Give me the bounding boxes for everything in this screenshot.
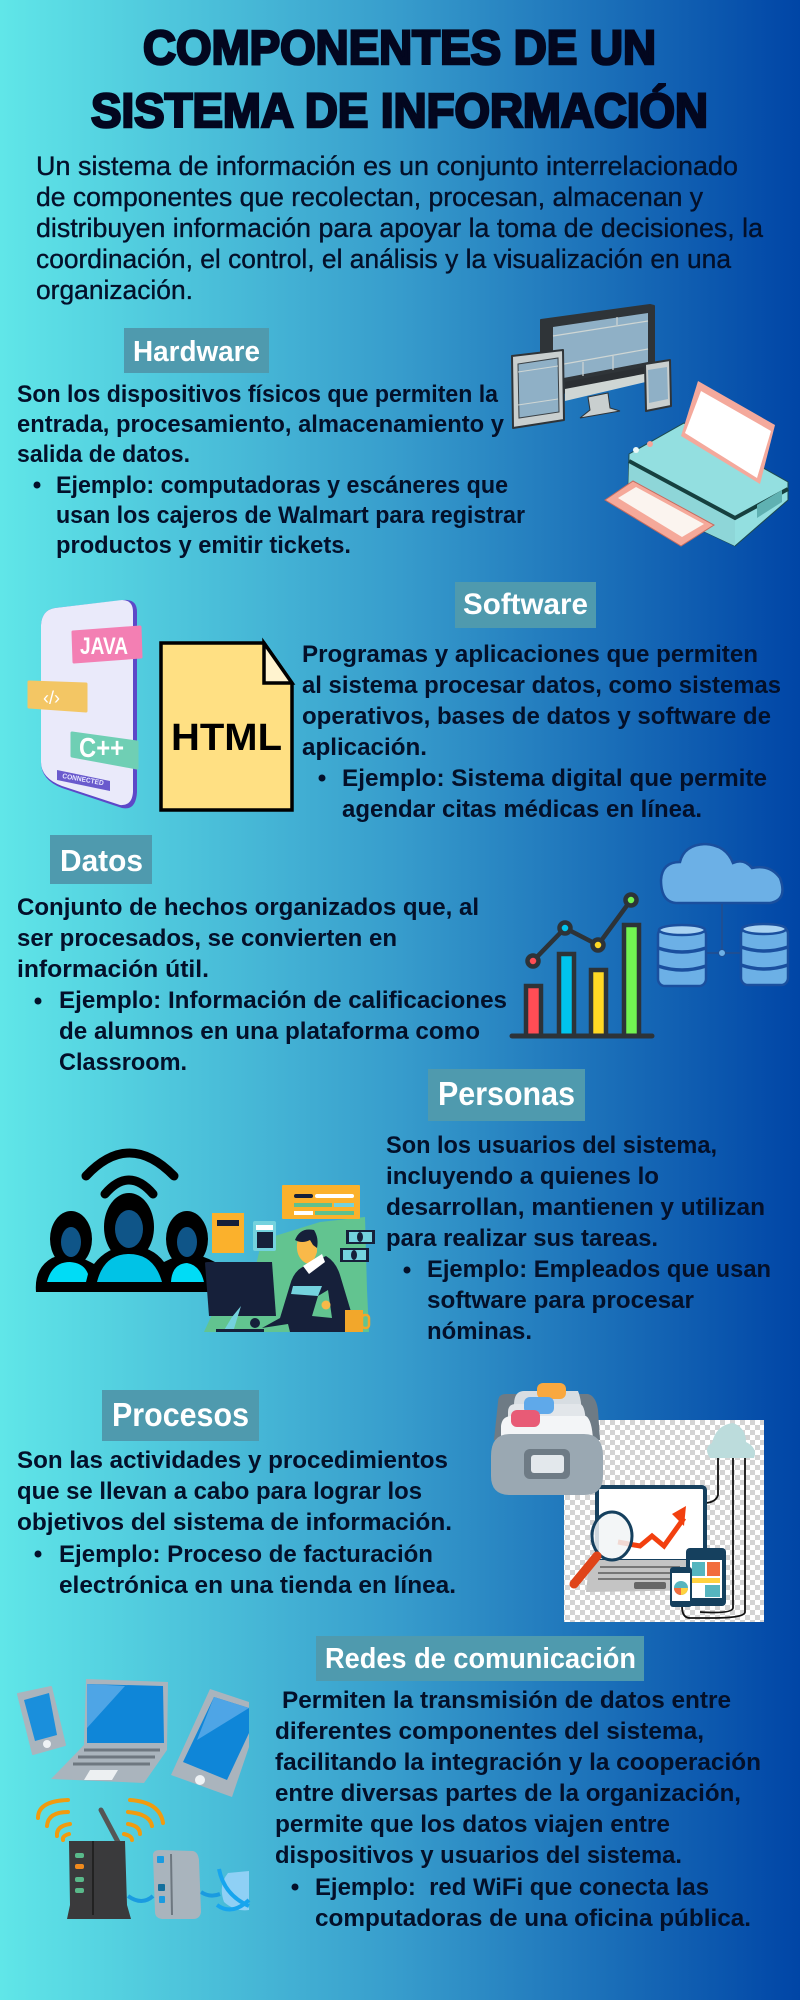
title: COMPONENTES DE UN	[143, 22, 656, 75]
intro text: organización.	[36, 275, 193, 305]
icon: connected people	[36, 1153, 215, 1292]
heading: personas: Personas	[438, 1075, 575, 1112]
icon: code phone: ‹/›	[43, 688, 60, 708]
procesos description: Ejemplo: Proceso de facturación	[59, 1541, 433, 1568]
icon: html file: HTML	[171, 717, 282, 759]
datos description: Classroom.	[59, 1049, 187, 1076]
panel: datos	[17, 835, 788, 1076]
datos description: Ejemplo: Información de calificaciones	[59, 987, 507, 1014]
personas description: Son los usuarios del sistema,	[386, 1132, 717, 1159]
software description: Programas y aplicaciones que permiten	[302, 641, 758, 668]
panel: procesos	[17, 1383, 764, 1622]
software description: aplicación.	[302, 734, 427, 761]
hardware description: usan los cajeros de Walmart para registrar	[56, 502, 525, 529]
intro text: distribuyen información para apoyar la toma de decisiones, la	[36, 213, 763, 243]
software description: Ejemplo: Sistema digital que permite	[342, 765, 767, 792]
redes description: facilitando la integración y la cooperación	[275, 1749, 761, 1776]
heading: redes de comunicación: Redes de comunicación	[325, 1643, 636, 1675]
procesos description: objetivos del sistema de información.	[17, 1509, 452, 1536]
personas description: software para procesar	[427, 1287, 694, 1314]
procesos description: electrónica en una tienda en línea.	[59, 1572, 456, 1599]
redes description: dispositivos y usuarios del sistema.	[275, 1842, 682, 1869]
icon: devices on checkered background	[564, 1420, 764, 1622]
redes description: permite que los datos viajen entre	[275, 1811, 670, 1838]
datos description: de alumnos en una plataforma como	[59, 1018, 480, 1045]
icon: code phone	[29, 600, 141, 808]
redes description: diferentes componentes del sistema,	[275, 1718, 704, 1745]
intro text: Un sistema de información es un conjunto interrelacionado	[36, 151, 738, 181]
panel: personas	[36, 1069, 771, 1345]
icon: code phone: JAVA	[80, 633, 128, 660]
intro text: de componentes que recolectan, procesan, almacenan y	[36, 182, 704, 212]
panel: software	[29, 582, 781, 823]
heading: hardware	[124, 328, 269, 373]
icon: printer	[605, 381, 788, 546]
hardware description	[17, 381, 525, 559]
panel: redes de comunicación	[18, 1636, 761, 1932]
personas description: desarrollan, mantienen y utilizan	[386, 1194, 765, 1221]
software description	[302, 641, 781, 823]
intro text	[36, 151, 763, 305]
personas description: Ejemplo: Empleados que usan	[427, 1256, 771, 1283]
heading: datos	[50, 835, 152, 884]
icon: code phone: C++	[79, 732, 124, 763]
icon: html file	[161, 643, 292, 810]
software description: operativos, bases de datos y software de	[302, 703, 771, 730]
heading: hardware: Hardware	[133, 336, 260, 368]
icon: code phone: CONNECTED	[62, 773, 104, 787]
icon: phone, laptop and tablet	[18, 1679, 249, 1797]
hardware description: salida de datos.	[17, 441, 190, 468]
redes description: entre diversas partes de la organización,	[275, 1780, 741, 1807]
heading: datos: Datos	[60, 843, 143, 878]
intro text: coordinación, el control, el análisis y la visualización en una	[36, 244, 731, 274]
icon: office worker	[204, 1185, 375, 1332]
redes description: computadoras de una oficina pública.	[315, 1905, 751, 1932]
personas description: para realizar sus tareas.	[386, 1225, 658, 1252]
title	[91, 22, 708, 138]
procesos description: Son las actividades y procedimientos	[17, 1447, 448, 1474]
title: SISTEMA DE INFORMACIÓN	[91, 83, 708, 138]
procesos description: que se llevan a cabo para lograr los	[17, 1478, 422, 1505]
heading: software	[455, 582, 596, 628]
personas description: incluyendo a quienes lo	[386, 1163, 659, 1190]
hardware description: Ejemplo: computadoras y escáneres que	[56, 472, 508, 499]
software description: agendar citas médicas en línea.	[342, 796, 702, 823]
hardware description: productos y emitir tickets.	[56, 532, 351, 559]
personas description: nóminas.	[427, 1318, 532, 1345]
datos description: ser procesados, se convierten en	[17, 925, 397, 952]
heading: software: Software	[463, 588, 588, 621]
redes description: Permiten la transmisión de datos entre	[282, 1687, 731, 1714]
datos description: Conjunto de hechos organizados que, al	[17, 894, 479, 921]
datos description	[17, 894, 507, 1076]
bar chart	[512, 894, 652, 1036]
redes description: Ejemplo: red WiFi que conecta las	[315, 1874, 709, 1901]
redes description	[275, 1687, 761, 1932]
hardware description: Son los dispositivos físicos que permiten la	[17, 381, 499, 408]
software description: al sistema procesar datos, como sistemas	[302, 672, 781, 699]
icon: wifi router and modem	[38, 1800, 249, 1919]
heading: procesos	[102, 1390, 259, 1441]
icon: cloud databases	[658, 844, 788, 986]
datos description: información útil.	[17, 956, 209, 983]
icon: monitor, tablet and phone	[512, 305, 671, 428]
procesos description	[17, 1447, 456, 1599]
heading: redes de comunicación	[316, 1636, 644, 1681]
heading: personas	[428, 1069, 585, 1121]
hardware description: entrada, procesamiento, almacenamiento y	[17, 411, 505, 438]
panel: hardware	[17, 305, 788, 559]
heading: procesos: Procesos	[112, 1396, 249, 1433]
personas description	[386, 1132, 771, 1345]
icon: file drawer	[491, 1383, 603, 1495]
